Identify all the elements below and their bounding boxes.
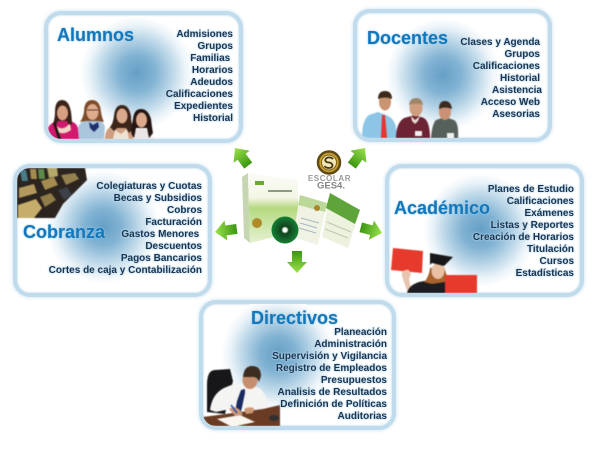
feature list: Planes de Estudio xyxy=(488,184,574,195)
feature list: Acceso Web xyxy=(481,97,540,108)
photo: graduate with diplomas xyxy=(390,247,478,293)
feature list: Descuentos xyxy=(145,241,202,252)
feature list: Familias xyxy=(190,53,230,64)
feature list: Horarios xyxy=(192,65,233,76)
photo: cash drawer xyxy=(17,168,88,219)
feature list: Calificaciones xyxy=(166,89,233,100)
feature list: Grupos xyxy=(504,49,540,60)
photo: executive signing documents xyxy=(204,365,281,426)
feature list: Asesorias xyxy=(492,109,540,120)
feature list: Cobros xyxy=(167,205,202,216)
feature list xyxy=(48,180,203,276)
feature list: Definición de Políticas xyxy=(280,399,387,410)
panel: Académico xyxy=(385,164,584,297)
product case xyxy=(322,193,360,248)
soft blue glow xyxy=(390,22,496,127)
heading: Académico xyxy=(394,198,490,218)
feature list xyxy=(472,184,575,279)
feature list: Colegiaturas y Cuotas xyxy=(96,181,202,192)
feature list xyxy=(166,28,234,124)
product booklet xyxy=(293,195,327,245)
feature list: Estadísticas xyxy=(516,268,574,279)
feature list: Cortes de caja y Contabilización xyxy=(49,265,202,276)
feature list: Pagos Bancarios xyxy=(121,253,202,264)
feature list: Gastos Menores xyxy=(121,229,199,240)
soft blue glow xyxy=(50,174,156,280)
heading: Alumnos xyxy=(57,25,134,45)
feature list: Listas y Reportes xyxy=(491,220,574,231)
panel: Alumnos xyxy=(44,11,243,143)
feature list: Planeación xyxy=(334,327,387,338)
product CD xyxy=(272,216,298,244)
feature list: Becas y Subsidios xyxy=(114,193,202,204)
logo: Escolar GES4: ESCOLAR xyxy=(308,174,351,183)
feature list: Presupuestos xyxy=(321,375,387,386)
feature list: Facturación xyxy=(145,217,202,228)
logo: Escolar GES4 xyxy=(308,152,351,192)
photo: three teachers xyxy=(362,90,459,138)
feature list: Creación de Horarios xyxy=(473,232,574,243)
arrow: to Alumnos xyxy=(227,142,256,172)
feature list: Cursos xyxy=(540,256,574,267)
feature list: Exámenes xyxy=(525,208,574,219)
feature list: Calificaciones xyxy=(473,61,540,72)
feature list: Auditorias xyxy=(338,411,387,422)
arrow: to Docentes xyxy=(344,142,373,172)
feature list: Historial xyxy=(500,73,540,84)
feature list: Historial xyxy=(193,113,233,124)
feature list: Admisiones xyxy=(176,29,233,40)
feature list: Calificaciones xyxy=(507,196,574,207)
panel: Directivos xyxy=(199,300,396,430)
feature list: Adeudos xyxy=(190,77,233,88)
heading: Directivos xyxy=(251,308,338,328)
feature list: Registro de Empleados xyxy=(276,363,387,374)
heading: Docentes xyxy=(367,28,448,48)
arrow: to Cobranza xyxy=(214,219,238,242)
feature list: Clases y Agenda xyxy=(460,37,540,48)
feature list: Analisis de Resultados xyxy=(278,387,387,398)
feature list xyxy=(460,36,543,120)
feature list xyxy=(272,326,388,422)
arrow: to Académico xyxy=(358,218,385,243)
feature list: Titulación xyxy=(527,244,574,255)
feature list: Administración xyxy=(314,339,387,350)
photo: four students xyxy=(48,99,154,139)
arrow: to Directivos xyxy=(287,251,307,273)
product box xyxy=(242,173,298,243)
panel: Cobranza xyxy=(13,164,212,297)
soft blue glow xyxy=(427,177,534,284)
soft blue glow xyxy=(225,304,332,406)
heading: Cobranza xyxy=(23,222,105,242)
panel: Docentes xyxy=(353,9,552,142)
soft blue glow xyxy=(84,16,190,124)
feature list: Asistencia xyxy=(492,85,542,96)
feature list: Supervisión y Vigilancia xyxy=(272,351,387,362)
logo: Escolar GES4: GES4. xyxy=(317,180,345,192)
feature list: Grupos xyxy=(197,41,233,52)
feature list: Expedientes xyxy=(174,101,233,112)
